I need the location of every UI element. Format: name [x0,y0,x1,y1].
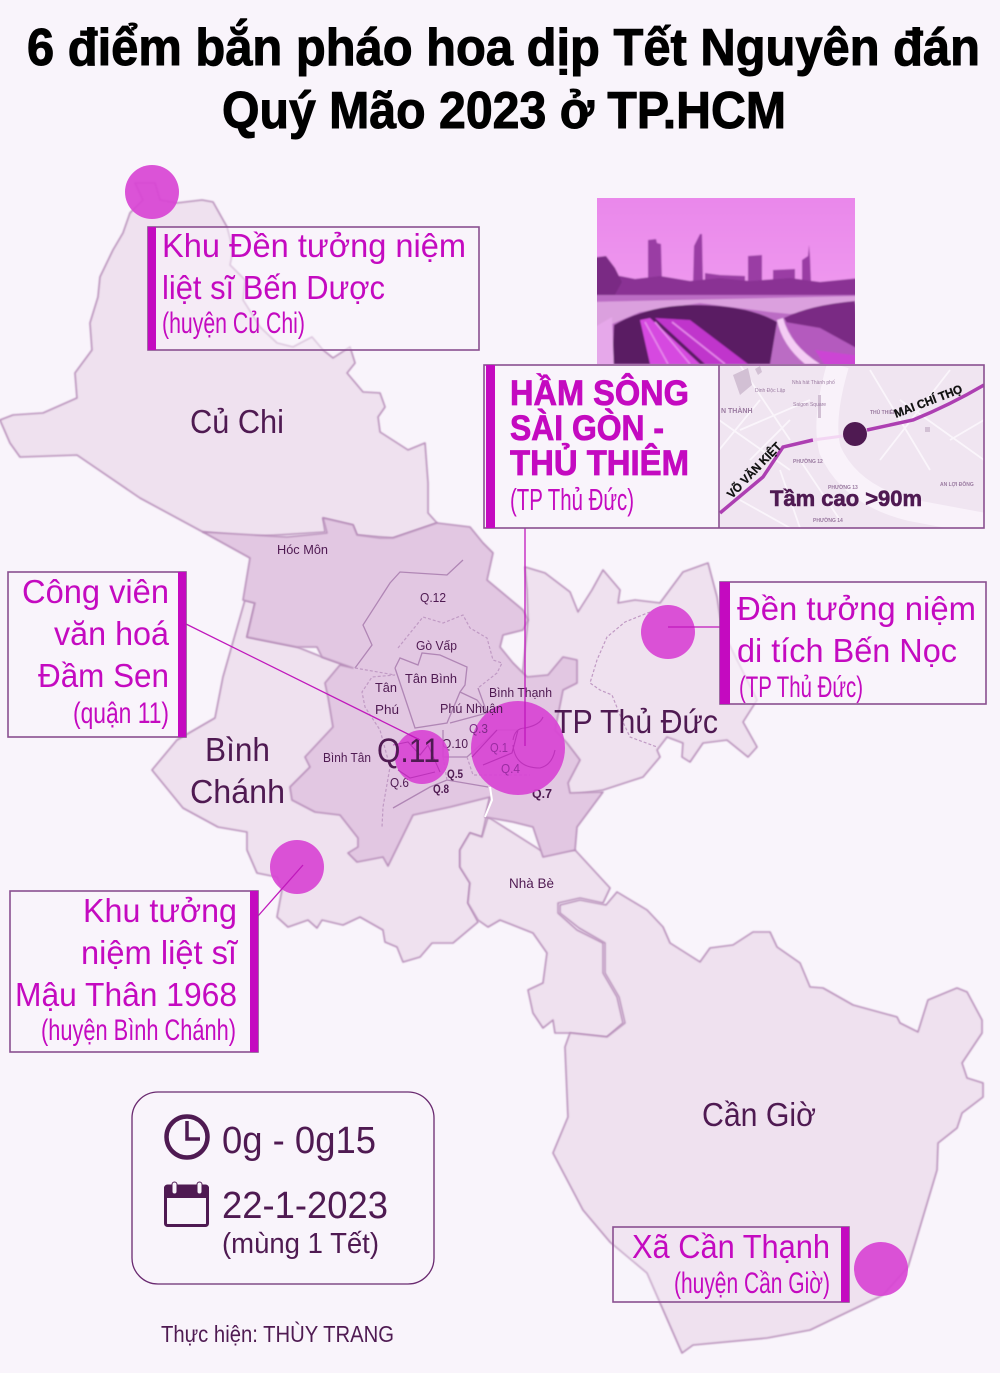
title [27,18,980,140]
inset street map: PHƯỜNG 12 [793,457,823,465]
region: Củ Chi [0,183,437,538]
region: Nhà Bè [460,817,623,1037]
marker: Mậu Thân 1968 [270,840,324,894]
district labels beneath markers: Bình Tân [323,750,371,765]
region: inner city districts [203,518,603,866]
district labels over markers: Q.3 [469,721,488,736]
panel: Hầm sông Sài Gòn - Thủ Thiêm: SÀI GÒN - [510,408,664,448]
district labels beneath markers: Gò Vấp [416,638,457,653]
decorative lines seen through the large marker [393,717,555,778]
panel: Xã Cần Thạnh: (huyện Cần Giờ) [674,1267,830,1300]
panel: Khu Đền tưởng niệm liệt sĩ Bến Dược: liệt sĩ Bến Dược [162,269,385,306]
icon: calendar [164,1182,209,1226]
large region labels: TP Thủ Đức [554,703,718,740]
district labels beneath markers: Q.7 [532,786,552,801]
marker: Bến Dược [125,165,179,219]
panel: Công viên văn hoá Đầm Sen: (quận 11) [73,697,169,730]
panel: Hầm sông Sài Gòn - Thủ Thiêm: THỦ THIÊM [510,443,689,483]
connector: Hầm sông [524,528,526,746]
marker: Cần Thạnh [854,1242,908,1296]
large region labels: Cần Giờ [702,1096,816,1133]
large region labels: Q.11 [377,732,440,770]
date: 22-1-2023 [222,1185,388,1227]
panel: Công viên văn hoá Đầm Sen: Đầm Sen [38,657,169,694]
panel: Khu Đền tưởng niệm liệt sĩ Bến Dược: (huyện Củ Chi) [162,307,305,340]
connector: Đầm Sen [186,624,420,740]
decorative lines: district boundaries [355,560,657,827]
district labels over markers: Bình Thạnh [489,685,552,700]
panel: time and date [132,1092,434,1284]
large region labels: Củ Chi [190,403,284,440]
inset street map: THỦ THIÊM [870,408,897,416]
marker: Bến Nọc [641,605,695,659]
panel: Xã Cần Thạnh: Xã Cần Thạnh [632,1228,830,1265]
tunnel marker [843,422,867,446]
district labels beneath markers: Q.12 [420,590,446,605]
panel: Khu tưởng niệm liệt sĩ Mậu Thân 1968: niệm liệt sĩ [81,934,239,971]
panel: Khu tưởng niệm liệt sĩ Mậu Thân 1968: Mậu Thân 1968 [15,976,237,1013]
connector: Mậu Thân [258,865,303,916]
connector: Bến Nọc [668,626,721,628]
inset street map: AN LỢI ĐÔNG [940,480,974,488]
panel: Hầm sông Sài Gòn - Thủ Thiêm [483,364,990,528]
panel: Đền tưởng niệm di tích Bến Nọc: (TP Thủ Đức) [739,671,863,704]
district labels over markers [440,685,552,776]
marker: Hầm sông Sài Gòn [471,701,565,795]
district labels beneath markers [277,542,554,891]
inset street map: Tầm cao >90m [770,486,922,511]
marker: Đầm Sen [395,730,449,784]
panel: Hầm sông Sài Gòn - Thủ Thiêm: (TP Thủ Đức) [510,482,634,517]
panel: Công viên văn hoá Đầm Sen: văn hoá [54,615,170,652]
district labels over markers: Q.4 [501,761,520,776]
panel: Khu tưởng niệm liệt sĩ Mậu Thân 1968: Khu tưởng [83,892,237,929]
inset street map: VÕ VĂN KIỆT [723,438,785,501]
time: 0g - 0g15 [222,1120,376,1162]
district labels beneath markers: Q.10 [442,736,468,751]
credit: Thực hiện: THÙY TRANG [161,1321,394,1347]
inset street map [719,365,990,528]
panel: Khu Đền tưởng niệm liệt sĩ Bến Dược: Khu Đền tưởng niệm [162,227,466,264]
district labels beneath markers: Q.5 [447,767,463,781]
panel: Khu tưởng niệm liệt sĩ Mậu Thân 1968: (huyện Bình Chánh) [41,1014,236,1047]
panel: Đền tưởng niệm di tích Bến Nọc [720,582,986,704]
district labels beneath markers: Nhà Bè [509,875,554,891]
inset street map: PHƯỜNG 14 [813,516,843,524]
panel: Xã Cần Thạnh [613,1227,849,1302]
panel: Khu tưởng niệm liệt sĩ Mậu Thân 1968 [10,891,258,1052]
district labels over markers: Q.1 [490,740,508,755]
inset street map: Saigon Square [793,402,826,408]
inset street map: N THÀNH [721,406,752,415]
panel: Công viên văn hoá Đầm Sen [8,572,186,737]
inset street map: Dinh Độc Lập [755,388,786,394]
large region labels: Bình [205,731,270,768]
inset street map: MAI CHÍ THỌ [892,381,964,421]
panel: Khu Đền tưởng niệm liệt sĩ Bến Dược [148,227,479,350]
panel: Hầm sông Sài Gòn - Thủ Thiêm: HẦM SÔNG [510,373,689,413]
district labels over markers: Phú Nhuận [440,701,503,716]
inset street map: Nhà hát Thành phố [792,380,835,386]
district labels beneath markers: Hóc Môn [277,542,328,557]
icon: clock [166,1116,208,1158]
photo: Saigon river tunnel and skyline [597,198,855,364]
inset street map: PHƯỜNG 13 [828,483,858,491]
large region labels: Chánh [190,773,285,810]
region: TP Thủ Đức [520,563,757,795]
large region labels [190,403,816,1133]
panel: Đền tưởng niệm di tích Bến Nọc: Đền tưởng niệm [737,590,976,627]
region: Cần Giờ [553,892,983,1353]
district labels beneath markers: Tân [375,680,397,695]
title: Quý Mão 2023 ở TP.HCM [222,82,786,140]
district labels beneath markers: Phú [375,702,399,717]
district labels beneath markers: Q.8 [433,782,449,796]
region: Bình Chánh [152,600,490,962]
date note: (mùng 1 Tết) [222,1228,379,1260]
panel: Công viên văn hoá Đầm Sen: Công viên [22,573,169,610]
district labels beneath markers: Q.6 [390,775,409,790]
district labels beneath markers: Tân Bình [405,671,457,686]
panel: Đền tưởng niệm di tích Bến Nọc: di tích Bến Nọc [737,632,957,669]
